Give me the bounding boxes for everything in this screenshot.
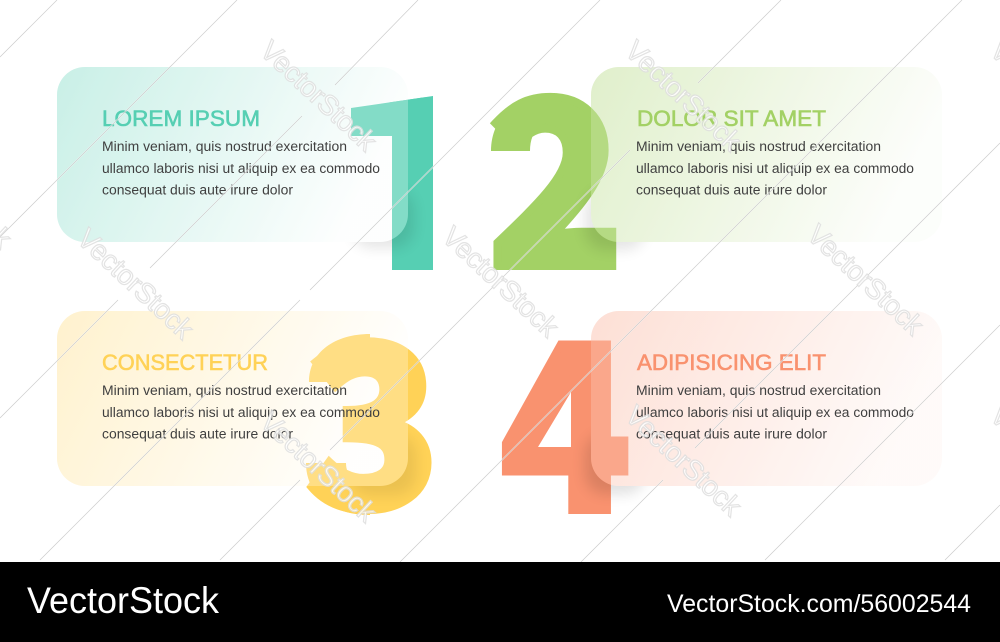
body text — [102, 139, 380, 198]
footer bar — [0, 562, 1000, 642]
body text: consequat duis aute irure dolor — [636, 182, 828, 198]
body text: consequat duis aute irure dolor — [102, 426, 294, 442]
panel: adipisicing elit — [502, 311, 934, 514]
watermarks: VectorStock — [801, 218, 930, 342]
body text: consequat duis aute irure dolor — [636, 426, 828, 442]
panel: lorem ipsum — [57, 67, 433, 270]
body text: Minim veniam, quis nostrud exercitation — [636, 139, 881, 154]
watermarks: VectorStock — [71, 222, 200, 346]
number 3: 3 — [306, 247, 440, 572]
watermarks: VectorStock — [254, 405, 383, 529]
watermarks — [0, 34, 1000, 529]
body text: ullamco laboris nisi ut aliquip ex ea commodo — [636, 405, 914, 420]
watermarks: VectorStock — [619, 399, 748, 523]
panel: dolor sit amet — [490, 67, 928, 270]
body text: Minim veniam, quis nostrud exercitation — [636, 383, 881, 398]
heading: DOLOR SIT AMET — [637, 106, 826, 131]
number 2: 2 — [488, 1, 624, 332]
heading: ADIPISICING ELIT — [637, 350, 826, 375]
watermarks: VectorStock — [254, 34, 383, 158]
heading: LOREM IPSUM — [102, 106, 260, 131]
body text: ullamco laboris nisi ut aliquip ex ea commodo — [102, 405, 380, 420]
number 4: 4 — [501, 247, 630, 576]
footer logo: VectorStock — [27, 580, 219, 621]
body text: Minim veniam, quis nostrud exercitation — [102, 139, 347, 154]
number 1: 1 — [331, 0, 476, 339]
footer image id: VectorStock.com/56002544 — [667, 590, 971, 618]
watermarks: VectorStock — [436, 220, 565, 344]
body text — [102, 383, 380, 442]
body text: Minim veniam, quis nostrud exercitation — [102, 383, 347, 398]
body text — [636, 139, 914, 198]
heading: CONSECTETUR — [102, 350, 268, 375]
body text: ullamco laboris nisi ut aliquip ex ea commodo — [102, 161, 380, 176]
panel: consectetur — [57, 311, 432, 515]
body text — [636, 383, 914, 442]
body text: ullamco laboris nisi ut aliquip ex ea commodo — [636, 161, 914, 176]
watermarks: VectorStock — [619, 34, 748, 158]
body text: consequat duis aute irure dolor — [102, 182, 294, 198]
